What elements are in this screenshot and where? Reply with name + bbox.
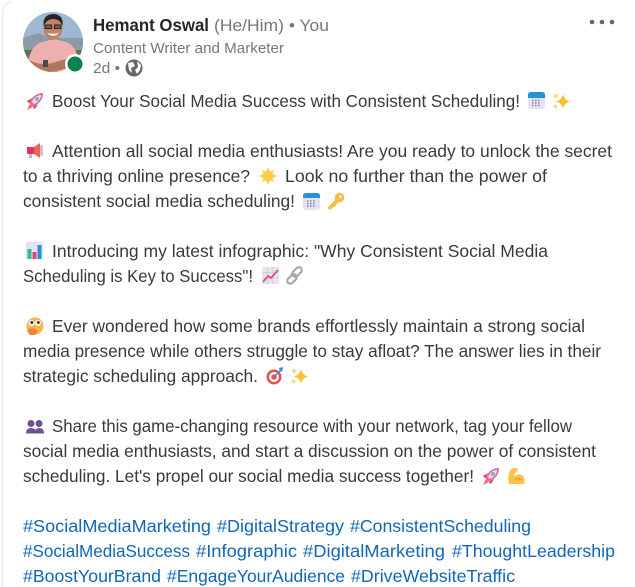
paragraph: call to action: social media enthusiasts, and start a discussion on the power of consistent xyxy=(23,441,596,461)
hashtags: #Infographic xyxy=(196,541,297,561)
opening headline: Boost Your Social Media Success with Consistent Scheduling! xyxy=(52,91,520,111)
paragraph: strategy question: media presence while others struggle to stay afloat? The answer lies in their xyxy=(23,341,601,361)
pronouns and connection: (He/Him) • You xyxy=(214,17,329,35)
paragraph: strategy question: Ever wondered how some brands effortlessly maintain a strong social xyxy=(52,316,585,336)
paragraph: strategy question: strategic scheduling approach. xyxy=(23,366,258,386)
icon: globe xyxy=(126,60,142,76)
paragraph: call to action: Share this game-changing resource with your network, tag your fellow xyxy=(52,416,572,436)
icon: calendar xyxy=(528,92,545,109)
hashtags: #DigitalMarketing xyxy=(303,541,445,561)
icon: key xyxy=(328,193,344,210)
icon: sparkles xyxy=(291,368,308,384)
paragraph: attention: to a thriving online presence? xyxy=(23,166,250,186)
paragraph: attention: Attention all social media enthusiasts! Are you ready to unlock the secret xyxy=(52,141,612,161)
hashtags xyxy=(23,516,615,586)
hashtags: #BoostYourBrand xyxy=(23,566,161,586)
icon: bar chart xyxy=(26,242,43,259)
hashtags: #ThoughtLeadership xyxy=(452,541,615,561)
paragraph: infographic xyxy=(23,241,548,286)
icon: people xyxy=(26,420,44,434)
icon: flexed arm xyxy=(508,468,525,484)
paragraph: attention: Look no further than the power of xyxy=(285,166,547,186)
icon: rocket xyxy=(483,468,499,485)
post age: 2d • xyxy=(93,61,120,77)
icon: calendar xyxy=(303,193,320,210)
icon: sparkles xyxy=(553,93,570,109)
icon: thinking face xyxy=(26,318,44,335)
icon: trend chart xyxy=(262,267,279,284)
icon: rocket xyxy=(27,93,43,110)
paragraph: infographic: Scheduling is Key to Success"! xyxy=(23,266,253,286)
author name: Hemant Oswal xyxy=(93,15,209,35)
author headline: Content Writer and Marketer xyxy=(93,41,284,57)
hashtags: #SocialMediaMarketing xyxy=(23,516,211,536)
author avatar xyxy=(23,12,85,74)
icon: sun xyxy=(259,167,277,185)
hashtags: #ConsistentScheduling xyxy=(350,516,531,536)
hashtags: #DigitalStrategy xyxy=(217,516,344,536)
icon: link xyxy=(286,266,303,285)
icon: megaphone xyxy=(27,143,43,158)
icon: target xyxy=(266,367,283,384)
paragraph: attention: consistent social media scheduling! xyxy=(23,191,295,211)
paragraph: strategy question xyxy=(23,316,601,386)
paragraph: attention xyxy=(23,141,612,211)
hashtags: #EngageYourAudience xyxy=(167,566,345,586)
paragraph: infographic: Introducing my latest infographic: "Why Consistent Social Media xyxy=(52,241,548,261)
hashtags: #DriveWebsiteTraffic xyxy=(351,566,515,586)
paragraph: call to action: scheduling. Let's propel our social media success together! xyxy=(23,466,474,486)
hashtags: #SocialMediaSuccess xyxy=(23,541,190,561)
icon: more menu xyxy=(590,20,614,24)
paragraph: call to action xyxy=(23,416,596,486)
